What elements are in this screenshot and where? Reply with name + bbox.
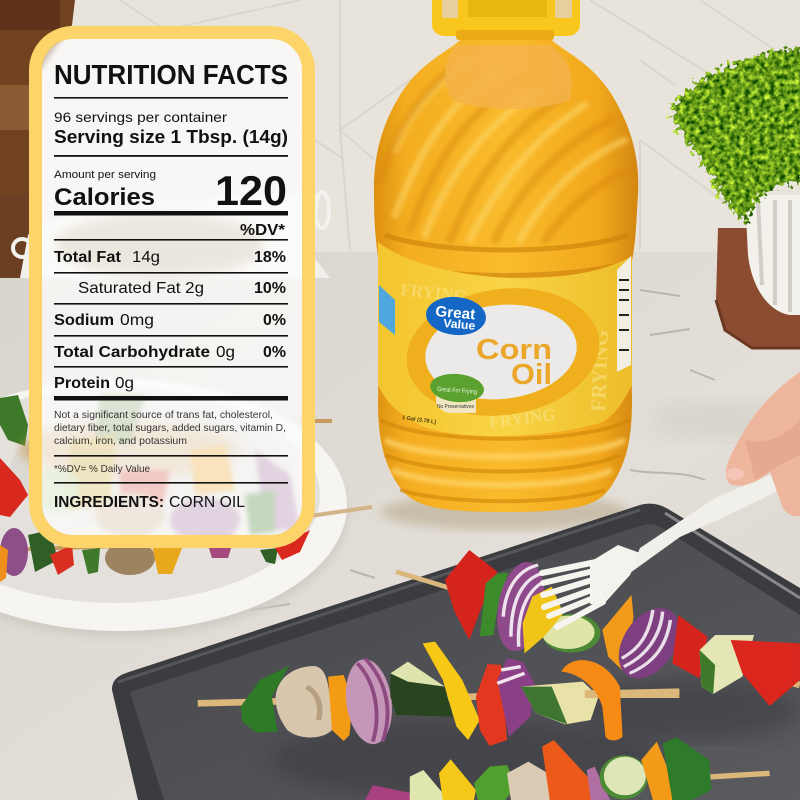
row: sodium: Sodium (54, 312, 114, 329)
footnote: not a significant source: dietary fiber, total sugars, added sugars, vitamin D, (54, 422, 286, 434)
frying watermark text (400, 280, 613, 432)
kebab: middle skewer (198, 642, 679, 746)
calories value: 120 (215, 167, 287, 214)
panel: nutrition facts frosted card (29, 26, 315, 548)
serving size: Serving size 1 Tbsp. (14g) (54, 127, 288, 147)
row: total carbohydrate: 0g (216, 344, 235, 361)
frying watermark text: FRYING (400, 280, 468, 306)
marble counter (0, 252, 800, 800)
ingredients: INGREDIENTS: (54, 494, 164, 511)
heading: nutrition facts: NUTRITION FACTS (54, 59, 288, 90)
nutrition facts text and rules (54, 59, 288, 511)
servings per container: 96 servings per container (54, 109, 227, 125)
product name: Oil (511, 359, 552, 391)
row: total carbohydrate: 0% (263, 344, 286, 361)
Great Value logo: Value (443, 316, 476, 333)
basting brush (542, 462, 800, 627)
green badge: No Preservatives (437, 404, 474, 410)
blue side panel (379, 285, 395, 335)
lower bottle ribs (385, 440, 625, 485)
side nutrition panel (617, 256, 631, 372)
row: total fat: 14g (132, 249, 160, 266)
footnote: not a significant source: calcium, iron, and potassium (54, 435, 187, 447)
bottle body (374, 38, 638, 512)
kebabs on plate (0, 395, 372, 582)
row: total fat: 18% (254, 249, 286, 266)
white plate (0, 379, 347, 637)
baking tray (112, 504, 800, 800)
frying watermark text: FRYING (586, 329, 613, 412)
swirl ribs (380, 60, 632, 240)
product name: Corn (476, 334, 552, 366)
wooden board, left (0, 0, 75, 278)
percent daily value header: %DV* (240, 222, 286, 239)
row: saturated fat: 10% (254, 280, 286, 297)
kebab: lower skewer (365, 737, 770, 800)
calories label: Calories (54, 184, 155, 211)
row: total carbohydrate: Total Carbohydrate (54, 344, 210, 361)
row: total carbohydrate (54, 344, 286, 361)
corn oil bottle (374, 0, 638, 530)
white bowl behind panel (13, 192, 330, 278)
footnote: not a significant source (54, 409, 286, 447)
row: total fat (54, 249, 286, 266)
row: sodium: 0% (263, 312, 286, 329)
corn oil bottle: 1 Gal (3.78 L) (402, 415, 437, 426)
row: protein: 0g (115, 375, 134, 392)
hand holding brush (726, 372, 800, 516)
row: saturated fat: Saturated Fat 2g (78, 280, 204, 297)
row: sodium: 0mg (120, 312, 154, 329)
footnote: daily value: *%DV= % Daily Value (54, 463, 150, 475)
kebab: upper skewer (396, 550, 800, 706)
cap and handle (432, 0, 580, 36)
white oval (421, 297, 581, 407)
vegetable kebabs on tray (198, 550, 800, 800)
Great Value logo (424, 294, 488, 338)
green badge (429, 372, 485, 413)
ingredients (54, 494, 245, 511)
Great Value logo: Great (435, 303, 476, 323)
amount per serving: Amount per serving (54, 169, 156, 181)
plant with pot and board (672, 48, 800, 348)
row: protein (54, 375, 134, 392)
row: total fat: Total Fat (54, 249, 122, 266)
product name (476, 334, 552, 391)
orange swoosh (398, 276, 608, 428)
frying watermark text: FRYING (488, 405, 556, 432)
footnote: not a significant source: Not a significant source of trans fat, cholesterol, (54, 409, 273, 421)
green badge: Great For Frying (437, 386, 478, 396)
product label (378, 242, 632, 436)
row: saturated fat (78, 280, 286, 297)
ingredients: CORN OIL (169, 494, 245, 511)
row: protein: Protein (54, 375, 110, 392)
row: sodium (54, 312, 286, 329)
tiled wall (0, 0, 800, 290)
